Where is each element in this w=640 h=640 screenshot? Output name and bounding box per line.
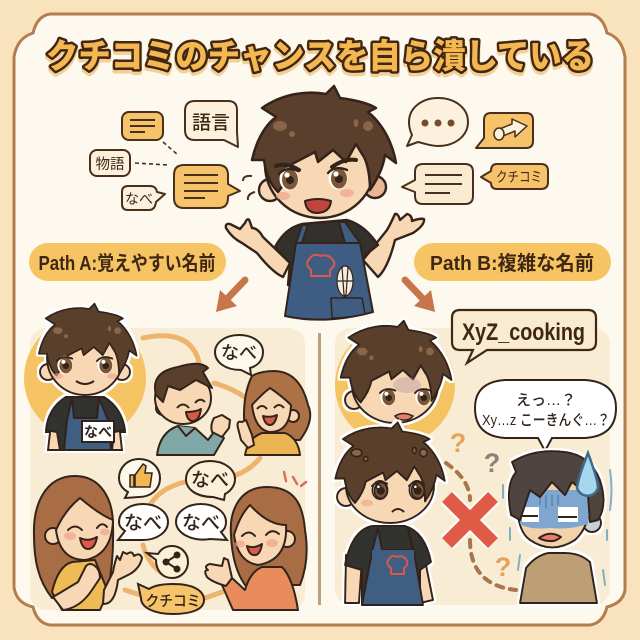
character: woman left	[34, 476, 142, 610]
character: friendly chef boy	[24, 303, 146, 450]
question marks: ?	[450, 428, 466, 458]
question marks: ?	[495, 552, 511, 582]
bubble: 語言: 語言	[192, 113, 230, 134]
bubble: XyZ_cooking	[452, 310, 596, 363]
sweat drop	[577, 453, 598, 496]
sweat lines	[503, 470, 612, 585]
bubble: クチコミ	[481, 164, 548, 189]
spark marks	[284, 472, 306, 486]
bubble: confused speech: Xy…z こーきんぐ…？	[482, 412, 610, 429]
arrow: to Path A	[216, 280, 245, 312]
bubble: 語言	[185, 101, 238, 147]
bubble: text	[402, 164, 473, 204]
character: main chef boy	[226, 86, 424, 320]
bubble: クチコミ	[138, 584, 204, 614]
bubble: なべ (right white): なべ	[182, 512, 220, 534]
sticker figure	[39, 303, 137, 450]
red cross	[447, 497, 493, 543]
head	[252, 86, 396, 218]
question marks	[450, 428, 511, 582]
character: woman in yellow small	[238, 371, 310, 455]
whisk	[337, 266, 353, 303]
bubble: クチコミ: クチコミ	[496, 169, 542, 185]
character: chef boy standing	[335, 422, 445, 605]
pocket	[331, 298, 365, 318]
bubble: XyZ_cooking: XyZ_cooking	[462, 319, 585, 346]
motion marks	[243, 176, 255, 200]
arrow: to Path B	[405, 280, 435, 312]
bubble: 物語: 物語	[96, 156, 124, 173]
torso and name tag: なべ	[84, 424, 112, 440]
bubble: なべ	[122, 186, 165, 210]
bubble: なべ (left white)	[118, 504, 168, 540]
character: woman right	[205, 487, 307, 610]
head	[39, 303, 137, 395]
bubble: confused speech	[475, 380, 616, 451]
bubble: confused speech: えっ…？	[516, 392, 576, 409]
bubble: なべ: なべ	[125, 191, 153, 207]
pill: Path B: Path B:複雑な名前	[430, 252, 594, 275]
bubble: 物語	[90, 150, 130, 176]
connector dashes	[135, 142, 178, 165]
bubble: なべ (left white): なべ	[124, 512, 162, 534]
bubble: share arrow	[476, 113, 533, 148]
divider	[318, 333, 321, 605]
circle backdrop	[24, 317, 146, 439]
right idea bubbles	[402, 98, 548, 204]
bubble: なべ (top): なべ	[221, 343, 257, 363]
bubble: なべ (right white)	[176, 504, 227, 540]
circle backdrop	[335, 325, 455, 445]
bubble: なべ (orange path)	[186, 461, 235, 500]
pill: Path A	[29, 243, 226, 281]
title: クチコミのチャンスを自ら潰している	[46, 41, 594, 79]
bubble: なべ (orange path): なべ	[191, 469, 229, 491]
chef hat icon	[307, 255, 334, 276]
apron	[285, 222, 373, 320]
panel: Path B background	[335, 328, 610, 605]
left idea bubbles	[90, 101, 240, 210]
character: confused listener	[509, 451, 604, 603]
bubble: クチコミ: クチコミ	[146, 593, 200, 610]
bubble: なべ (top)	[215, 335, 263, 375]
shirt	[275, 220, 378, 285]
sticker head	[341, 321, 452, 423]
pill: Path A: Path A:覚えやすい名前	[38, 252, 216, 275]
torso and name tag	[46, 397, 125, 450]
dashed confusion path	[446, 463, 516, 590]
small orange bubble	[122, 112, 163, 140]
bubble: thumbs up	[119, 459, 160, 498]
word of mouth path	[125, 336, 260, 598]
panel: Path A background	[30, 328, 305, 610]
question marks: ?	[484, 448, 500, 478]
arms and hands	[226, 214, 424, 277]
pill: Path B	[414, 243, 611, 281]
large orange bubble	[174, 165, 240, 208]
character: man in teal	[155, 364, 230, 455]
character: troubled chef boy head	[335, 321, 455, 445]
bubble: share icon	[147, 546, 188, 578]
bubble: ellipsis	[407, 98, 468, 146]
title: クチコミのチャンスを自ら潰している	[46, 38, 594, 76]
